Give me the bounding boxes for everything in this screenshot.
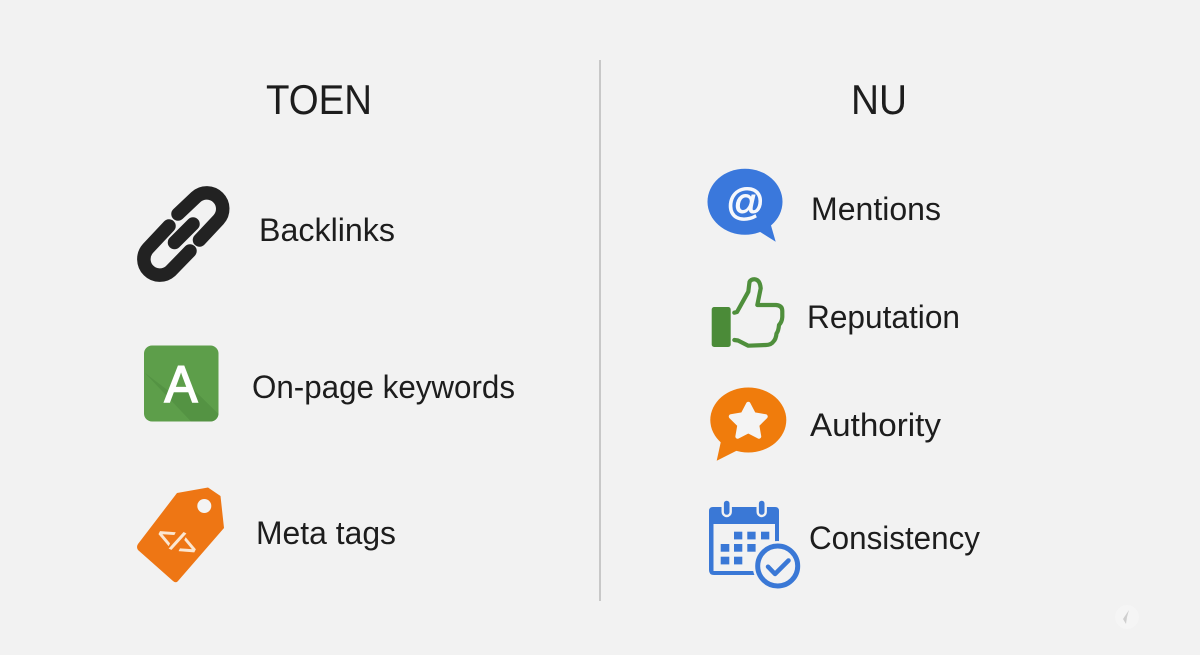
label: Consistency: Consistency [809, 520, 980, 556]
label: Meta tags: Meta tags [256, 515, 396, 551]
icon: chain link [144, 193, 223, 275]
heading: TOEN: TOEN [266, 76, 372, 123]
watermark mark [1115, 605, 1139, 629]
label: Reputation: Reputation [807, 299, 960, 335]
label: Mentions: Mentions [811, 191, 941, 227]
label: Authority: Authority [810, 407, 941, 443]
icon: blue mention bubble [708, 169, 782, 242]
icon: blue mention bubble: @ [726, 182, 765, 224]
label: Backlinks: Backlinks [259, 212, 395, 248]
panel: TOEN items [137, 193, 515, 582]
icon: green thumbs up [712, 279, 782, 347]
icon: green keyword tile [144, 346, 218, 422]
icon: calendar with check [709, 500, 803, 591]
icon: orange code tag [137, 488, 224, 582]
panel: NU items [708, 169, 980, 591]
icon: green keyword tile: A [164, 356, 198, 414]
icon: orange star bubble [710, 388, 786, 461]
heading: NU: NU [851, 76, 907, 123]
icon: orange code tag: </> [152, 518, 203, 565]
label: On-page keywords: On-page keywords [252, 369, 515, 405]
